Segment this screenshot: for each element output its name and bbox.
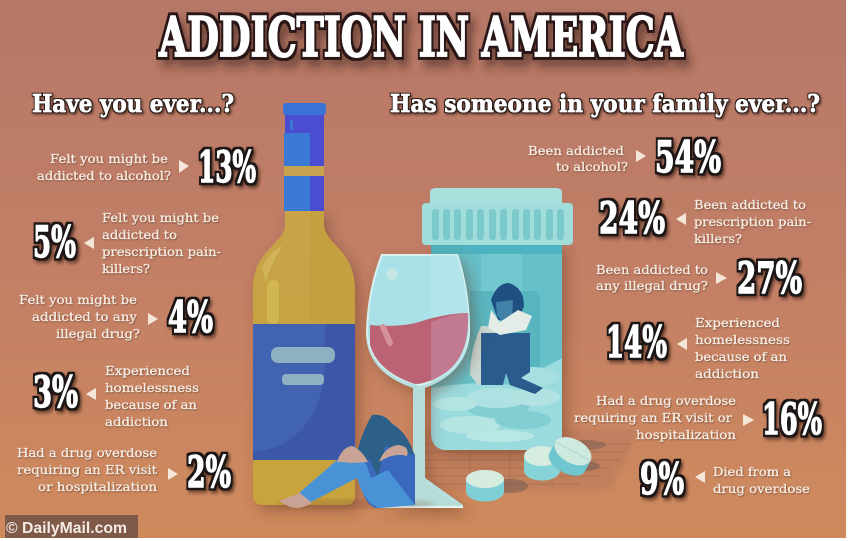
stat: 14% homelessness: addiction <box>695 366 759 381</box>
source credit: © DailyMail.com <box>6 520 127 537</box>
stat: 3% homelessness <box>33 363 199 429</box>
stat: 5% painkillers: killers? <box>102 261 150 276</box>
illustration: pill bottle <box>422 188 573 450</box>
stat: 5% painkillers: 5% <box>33 216 76 267</box>
stat: 4% illegal drug: illegal drug? <box>56 326 140 341</box>
stat: 4% illegal drug <box>19 291 213 342</box>
stat: 16% overdose: 16% <box>762 393 822 444</box>
foil capsule <box>285 112 324 211</box>
stat: 5% painkillers: addicted to <box>102 227 177 242</box>
stat: 54% alcohol: Been addicted <box>528 143 624 158</box>
stat: 4% illegal drug: Felt you might be <box>19 292 137 307</box>
stat: 2% overdose: or hospitalization <box>38 479 157 494</box>
stat: 2% overdose: requiring an ER visit <box>17 462 157 477</box>
stat: 24% painkillers: prescription pain- <box>694 214 811 229</box>
illustration: sitting woman <box>275 415 435 509</box>
stat: 3% homelessness: 3% <box>33 366 78 417</box>
stat: 14% homelessness: 14% <box>606 316 667 367</box>
stat: 13% alcohol: Felt you might be <box>50 151 168 166</box>
stat: 9% died: drug overdose <box>713 481 810 496</box>
sitting figure <box>470 283 543 394</box>
wine <box>370 313 468 384</box>
stat: 24% painkillers <box>599 192 811 246</box>
stat: 3% homelessness: Experienced <box>105 363 190 378</box>
stat: 3% homelessness: because of an <box>105 397 197 412</box>
stat: 16% overdose: requiring an ER visit or <box>574 410 732 425</box>
stat: 4% illegal drug: 4% <box>168 291 213 342</box>
stat: 5% painkillers: prescription pain- <box>102 244 221 259</box>
stat: 54% alcohol <box>528 131 721 182</box>
glass bowl <box>367 255 469 385</box>
source credit <box>5 515 138 538</box>
stat: 24% painkillers: killers? <box>694 231 742 246</box>
stat: 27% illegal drug: 27% <box>737 252 802 303</box>
stat: 9% died: 9% <box>640 453 684 504</box>
stat: 14% homelessness: homelessness <box>695 332 790 347</box>
stat: 54% alcohol: to alcohol? <box>556 159 628 174</box>
stat: 16% overdose: hospitalization <box>636 427 736 442</box>
stat: 27% illegal drug: Been addicted to <box>596 262 708 277</box>
stat: 16% overdose <box>574 393 822 444</box>
stat: 27% illegal drug: any illegal drug? <box>596 278 708 293</box>
stat: 9% died: Died from a <box>713 464 792 479</box>
stat: 5% painkillers: Felt you might be <box>102 210 219 225</box>
label bars <box>271 347 335 363</box>
bottle silhouette <box>253 210 355 505</box>
stat: 2% overdose <box>17 445 231 497</box>
stat: 16% overdose: Had a drug overdose <box>596 393 736 408</box>
stat: 5% painkillers <box>33 210 221 276</box>
illustration: wine bottle <box>253 103 355 505</box>
stat: 13% alcohol: addicted to alcohol? <box>37 168 171 183</box>
stat: 3% homelessness: homelessness <box>105 380 199 395</box>
stat: 24% painkillers: Been addicted to <box>694 197 806 212</box>
stem and base <box>376 386 463 508</box>
stat: 9% died <box>640 453 810 504</box>
bottle body <box>431 243 562 450</box>
stat: 3% homelessness: addiction <box>105 414 168 429</box>
stat: 13% alcohol <box>37 141 256 192</box>
stat: 13% alcohol: 13% <box>198 141 256 192</box>
bottle cap <box>430 188 562 206</box>
stat: 2% overdose: Had a drug overdose <box>17 445 157 460</box>
stat: 14% homelessness: Experienced <box>695 315 780 330</box>
illustration: floor planks <box>420 430 640 490</box>
stat: 14% homelessness: because of an <box>695 349 787 364</box>
stat: 54% alcohol: 54% <box>655 131 721 182</box>
heading: have you ever: Have you ever...? <box>32 90 234 118</box>
stat: 4% illegal drug: addicted to any <box>32 309 138 324</box>
heading: has someone in your family ever: Has someone in your family ever...? <box>390 90 820 118</box>
stat: 2% overdose: 2% <box>187 446 231 497</box>
stat: 14% homelessness <box>606 315 790 381</box>
illustration: wine glass <box>366 254 470 508</box>
wine label <box>253 324 355 460</box>
illustration: loose pills <box>466 431 606 502</box>
title: ADDICTION IN AMERICA <box>158 6 684 70</box>
pills inside bottle <box>431 358 562 450</box>
stat: 27% illegal drug <box>596 252 802 303</box>
stat: 24% painkillers: 24% <box>599 192 665 243</box>
